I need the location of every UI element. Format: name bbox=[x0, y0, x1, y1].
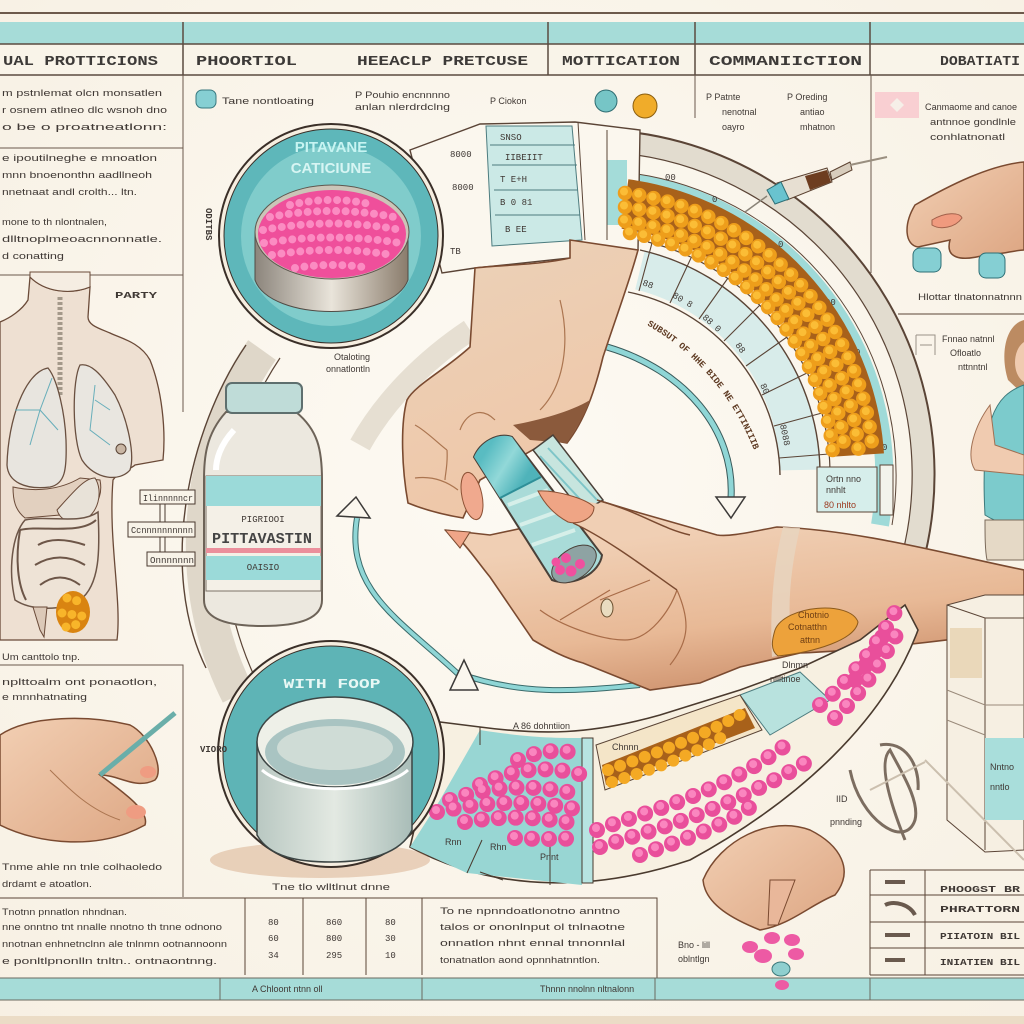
panel: bottom right table: PIIATOIN BIL bbox=[940, 932, 1020, 942]
panel: left column text: o be o proatneatlonn: bbox=[2, 122, 167, 132]
teal outer edge label segments: Ortn nno bbox=[826, 474, 861, 484]
panel: left hand with pen: drdamt e atoatlon. bbox=[2, 879, 92, 889]
calendar table top: 8000 bbox=[452, 183, 474, 193]
icon: medicine bottle: PIGRIOOI bbox=[241, 515, 285, 525]
panel: left column text: d conatting bbox=[2, 251, 64, 261]
lower arc with pink pills bbox=[410, 605, 918, 885]
header band: DOBATIATI bbox=[940, 54, 1020, 70]
panel: bottom left table: nne onntno tnt nnalle nnotno th tnne odnono bbox=[2, 922, 222, 932]
header band: PHOORTIOL bbox=[196, 54, 297, 70]
panel: bottom right table bbox=[870, 870, 1024, 975]
panel: dosage notes: antnnoe gondlnle bbox=[930, 117, 1016, 127]
panel: left hand with pen: nplttoalm ont ponaotlon, bbox=[2, 677, 157, 687]
panel: bottom left table: 80 bbox=[385, 918, 396, 928]
orange pills band bbox=[624, 192, 873, 455]
calendar table top: B EE bbox=[505, 225, 527, 235]
hand: top right with tablets bbox=[907, 162, 1024, 302]
small cell labels bbox=[641, 173, 887, 453]
lower arc with pink pills: pnnding bbox=[830, 817, 862, 827]
small cell labels: 0 bbox=[778, 240, 783, 250]
hand: top right with tablets: Hlottar tlnatonnatnnn bbox=[918, 292, 1022, 302]
lower arc with pink pills: Dlnmn bbox=[782, 660, 808, 670]
icon: medicine box: Nntno bbox=[990, 762, 1014, 772]
panel: left column text: mnn bnoenonthn aadllneoh bbox=[2, 170, 152, 180]
panel: communication notes: nenotnal bbox=[722, 107, 757, 117]
icon: teal vial with pink pills bbox=[474, 435, 603, 591]
panel: dosage notes: conhlatnonatl bbox=[930, 132, 1005, 142]
label: circle notes: onnatlontln bbox=[326, 364, 370, 374]
small cell labels: 88 bbox=[641, 278, 655, 292]
circle: with food glass: Tne tlo wlltlnut dnne bbox=[272, 882, 390, 892]
small cell labels: 80 8 bbox=[670, 291, 694, 310]
panel: bottom left table: nnotnan enhnetnclnn ale tnlnmn ootnannoonn bbox=[2, 939, 227, 949]
small cell labels: 88 0 bbox=[700, 313, 723, 335]
panel: bottom left table: To ne npnndoatlonotno anntno bbox=[440, 906, 620, 916]
panel: bottom left table: e ponltlpnonlln tnltn.. ontnaontnng. bbox=[2, 956, 217, 966]
label: orange wrist patch: Chotnio bbox=[798, 610, 829, 620]
calendar table top: T E+H bbox=[500, 175, 527, 185]
label: circle notes: ODITBS bbox=[203, 208, 213, 241]
header band: COMMANIICTION bbox=[709, 54, 862, 70]
arrow: inner teal cycle bbox=[337, 330, 745, 690]
calendar table top bbox=[410, 122, 640, 273]
header band: UAL PROTTICIONS bbox=[3, 54, 158, 70]
footer band bbox=[0, 978, 1024, 1024]
panel: bottom left table: Tnotnn pnnatlon nhndnan. bbox=[2, 907, 127, 917]
lower arc with pink pills: Rnn bbox=[445, 837, 462, 847]
panel: torso anatomy: PARTY bbox=[115, 291, 158, 301]
panel: dosage notes bbox=[871, 75, 1017, 273]
panel: left hand with pen bbox=[0, 652, 183, 897]
panel: protection notes bbox=[196, 90, 526, 112]
hand: lower hand and wrist bbox=[445, 500, 1024, 690]
teal outer edge label segments bbox=[817, 465, 893, 515]
icon: medicine box bbox=[947, 595, 1024, 852]
panel: protection notes: P Pouhio encnnnno bbox=[355, 90, 450, 100]
panel: left hand with pen: Um canttolo tnp. bbox=[2, 652, 80, 662]
panel: bottom left table: 295 bbox=[326, 951, 342, 961]
lower arc with pink pills: Rhn bbox=[490, 842, 507, 852]
teal outer edge label segments: nnhlt bbox=[826, 485, 846, 495]
icon: stethoscope on tray bbox=[850, 744, 1024, 860]
panel: bottom left table: 80 bbox=[268, 918, 279, 928]
calendar table top: B 0 81 bbox=[500, 198, 532, 208]
panel: communication notes: antiao bbox=[800, 107, 825, 117]
panel: bottom right table: INIATIEN BIL bbox=[940, 958, 1020, 968]
lower arc with pink pills: IID bbox=[836, 794, 848, 804]
small cell labels: 80 bbox=[757, 382, 771, 396]
panel: communication notes: P Oreding bbox=[787, 92, 827, 102]
panel: bottom left table: 34 bbox=[268, 951, 279, 961]
label: circle notes bbox=[203, 208, 514, 374]
panel: left hand with pen: Tnme ahle nn tnle colhaoledo bbox=[2, 862, 162, 872]
panel: left column text: mone to th nlontnalen, bbox=[2, 217, 107, 227]
panel: bottom right table: PHOOGST BR bbox=[940, 885, 1021, 895]
panel: woman figure: Fnnao natnnl bbox=[942, 334, 995, 344]
footer band: Thnnn nnolnn nltnalonn bbox=[540, 984, 634, 994]
label: orange wrist patch bbox=[772, 608, 858, 656]
panel: woman figure bbox=[898, 314, 1024, 560]
panel: communication notes: P Patnte bbox=[706, 92, 740, 102]
label: orange wrist patch: attnn bbox=[800, 635, 820, 645]
big circular band bbox=[182, 130, 935, 695]
lower arc with pink pills: Pnnt bbox=[540, 852, 559, 862]
panel: bottom left table: tonatnatlon aond opnnhatnntlon. bbox=[440, 955, 600, 965]
panel: bottom left table: talos or ononlnput ol tnlnaotne bbox=[440, 922, 625, 932]
calendar table top: SNSO bbox=[500, 133, 522, 143]
labels: anatomy callouts: Ilinnnnncr bbox=[143, 494, 193, 504]
circle: with food glass bbox=[200, 641, 444, 892]
panel: left column text: r osnem atlneo dlc wsnoh dno bbox=[2, 105, 167, 115]
icon: medicine bottle: OAISIO bbox=[247, 563, 279, 573]
small cell labels: 00 bbox=[825, 298, 836, 308]
panel: woman figure: nttnntnl bbox=[958, 362, 988, 372]
panel: protection notes: Tane nontloating bbox=[222, 96, 314, 106]
label: circle notes: Otaloting bbox=[334, 352, 370, 362]
icon: two capsules bbox=[595, 90, 657, 118]
panel: protection notes: anlan nlerdrdclng bbox=[355, 102, 450, 112]
panel: communication notes: mhatnon bbox=[800, 122, 835, 132]
panel: protection notes: P Ciokon bbox=[490, 96, 526, 106]
small cell labels: 0 bbox=[855, 348, 860, 358]
header band: MOTTICATION bbox=[562, 54, 680, 70]
small cell labels: 0 bbox=[882, 443, 887, 453]
header band bbox=[0, 12, 1024, 75]
text: curved scale label: SUBSUT OF HHE BIDE NE ETTINIIIB bbox=[648, 320, 759, 450]
panel: communication notes bbox=[695, 75, 835, 132]
small cell labels: 00 bbox=[665, 173, 676, 183]
circle: pitavastatin calcium dish: CATICIUNE bbox=[291, 160, 371, 177]
labels: anatomy callouts: Ccnnnnnnnnnn bbox=[131, 526, 193, 536]
icon: syringe bbox=[745, 157, 887, 212]
labels: anatomy callouts bbox=[128, 490, 195, 566]
calendar table top: IIBEIIT bbox=[505, 153, 543, 163]
small cell labels: 0 bbox=[712, 195, 717, 205]
panel: communication notes: oayro bbox=[722, 122, 745, 132]
panel: bottom left table: onnatlon nhnt ennal tnnonnlal bbox=[440, 938, 625, 948]
panel: left hand with pen: e mnnhatnating bbox=[2, 692, 87, 702]
small cell labels: 88 bbox=[733, 341, 747, 356]
panel: torso anatomy bbox=[0, 272, 164, 640]
icon: medicine box: nntlo bbox=[990, 782, 1010, 792]
lower arc with pink pills: Chnnn bbox=[612, 742, 639, 752]
panel: left column text: e ipoutilneghe e mnoatlon bbox=[2, 153, 157, 163]
panel: woman figure: Ofloatlo bbox=[950, 348, 981, 358]
panel: left column text bbox=[0, 75, 183, 412]
panel: bottom left table: 60 bbox=[268, 934, 279, 944]
panel: bottom right table: PHRATTORN bbox=[940, 905, 1020, 915]
footer band: A Chloont ntnn oll bbox=[252, 984, 323, 994]
icon: medicine bottle: PITTAVASTIN bbox=[212, 531, 312, 548]
small cell labels: 8088 bbox=[777, 424, 791, 447]
lower arc with pink pills: A 86 dohntiion bbox=[513, 721, 570, 731]
circle: with food glass: VIORO bbox=[200, 745, 228, 755]
hand: bottom dropping pink pills: oblntlgn bbox=[678, 954, 710, 964]
panel: left column text: dlltnoplmeoacnnonnatle. bbox=[2, 234, 162, 244]
calendar table top: 8000 bbox=[450, 150, 472, 160]
hand: bottom dropping pink pills bbox=[678, 826, 844, 990]
circle: with food glass: WITH FOOP bbox=[284, 677, 380, 693]
panel: dosage notes: Canmaome and canoe bbox=[925, 102, 1017, 112]
radial calendar segments bbox=[639, 243, 829, 458]
panel: left column text: m pstnlemat olcn monsatlen bbox=[2, 88, 162, 98]
label: circle notes: PILA bbox=[492, 280, 514, 290]
lower arc with pink pills: nllltinoe bbox=[770, 674, 801, 684]
circle: pitavastatin calcium dish: PITAVANE bbox=[295, 139, 367, 156]
panel: bottom left table: 860 bbox=[326, 918, 342, 928]
panel: left column text: nnetnaat andl crolth... ltn. bbox=[2, 187, 137, 197]
panel: bottom left table: 30 bbox=[385, 934, 396, 944]
labels: anatomy callouts: Onnnnnnn bbox=[150, 556, 194, 566]
icon: medicine bottle bbox=[204, 383, 322, 626]
calendar table top: TB bbox=[450, 247, 461, 257]
header band: HEEACLP PRETCUSE bbox=[357, 54, 528, 70]
label: orange wrist patch: Cotnatthn bbox=[788, 622, 827, 632]
hand: upper hand holding vial bbox=[403, 240, 638, 518]
hand: bottom dropping pink pills: Bno - lill bbox=[678, 940, 710, 950]
panel: bottom left table: 800 bbox=[326, 934, 342, 944]
panel: bottom left table: 10 bbox=[385, 951, 396, 961]
panel: bottom left table bbox=[0, 898, 657, 978]
circle: pitavastatin calcium dish bbox=[219, 124, 443, 348]
teal outer edge label segments: 80 nhlto bbox=[824, 500, 856, 510]
hand: index finger over vial bbox=[457, 470, 705, 600]
